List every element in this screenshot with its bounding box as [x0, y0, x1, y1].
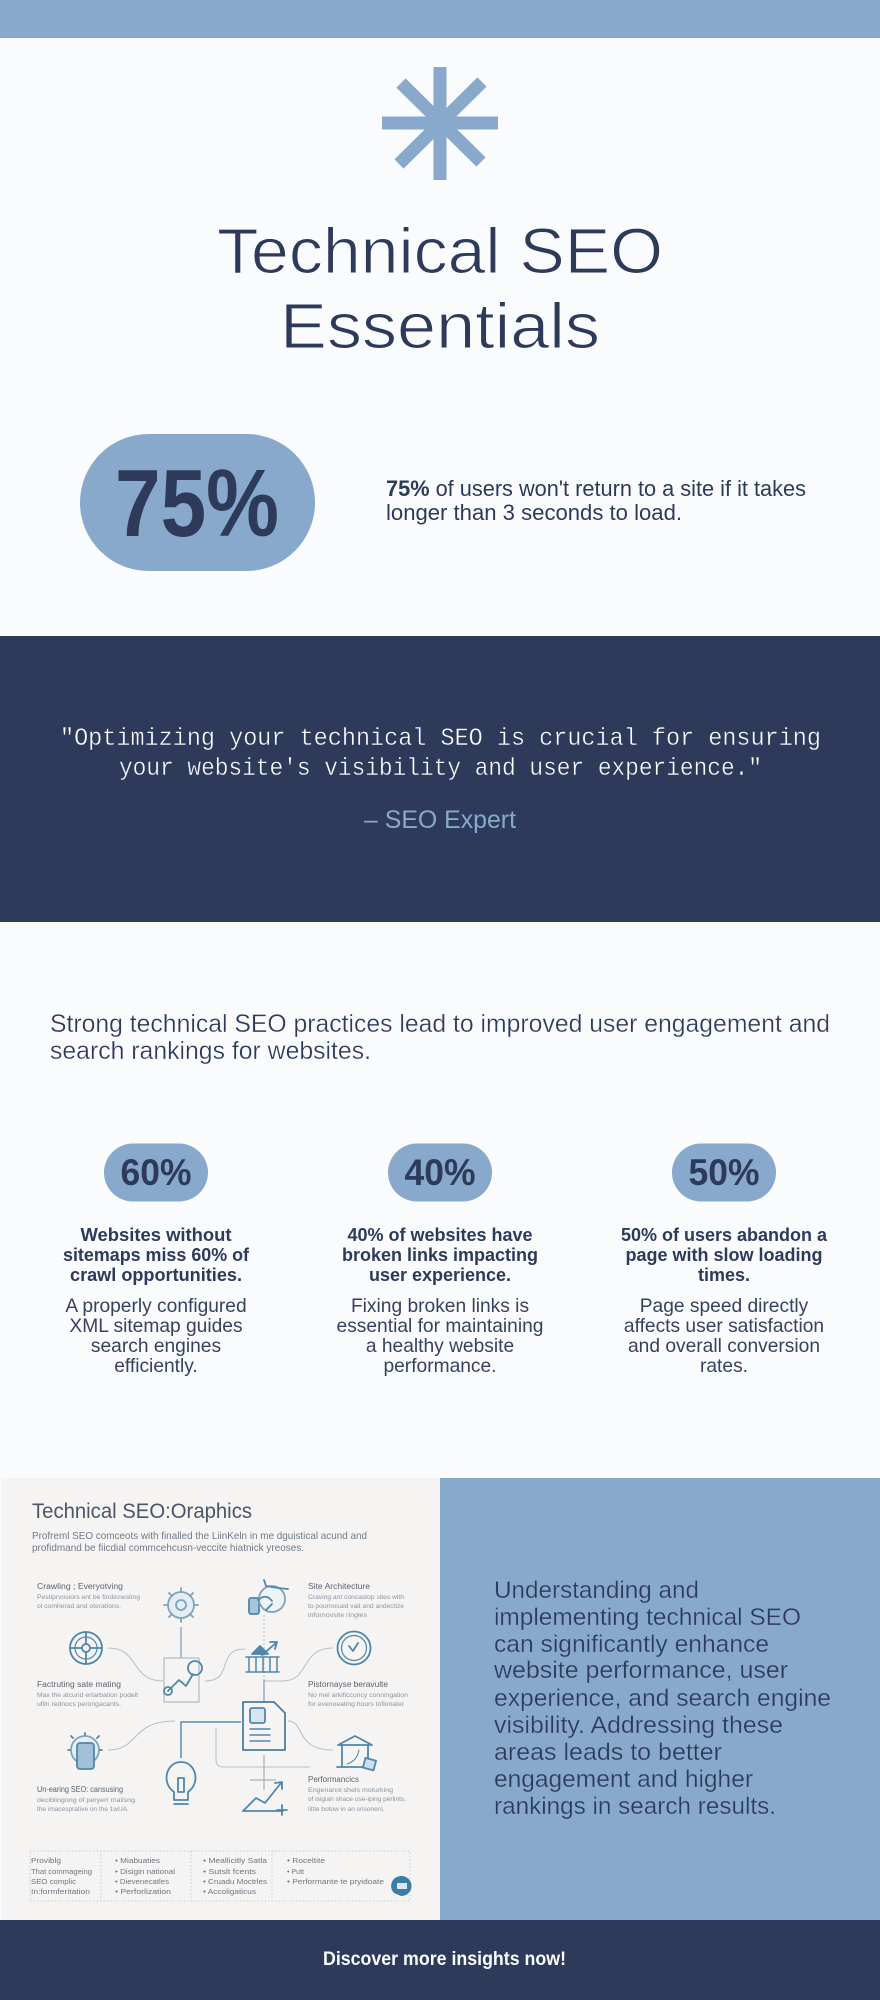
summary text: implementing technical SEO: [494, 1604, 801, 1631]
graphic labels: No mel arkificcuncy conningation: [308, 1692, 408, 1699]
graphic subtitle: [32, 1530, 367, 1554]
stat column: 50%: and overall conversion: [628, 1336, 820, 1357]
graphic labels: Un-earing SEO: cansusing: [37, 1785, 123, 1794]
icon: document: [243, 1702, 285, 1750]
graphic footer table: In:formferitation: [31, 1887, 90, 1896]
graphic footer table: SEO complic: [31, 1877, 76, 1886]
icon: light bulb: [167, 1762, 195, 1804]
summary text: areas leads to better: [494, 1739, 722, 1766]
stat column: 60%: efficiently.: [114, 1356, 198, 1377]
stat description: 75% of users won't return to a site if it takes: [386, 476, 806, 501]
graphic subtitle: profidmand be fiicdial commcehcusn-veccite hiatnick yreoses.: [32, 1542, 304, 1554]
graphic labels: the imacesprative on the 1wUA.: [37, 1806, 129, 1813]
graphic connectors: [108, 1615, 333, 1790]
graphic labels: Pestiprvosiors ent be findicnesting: [37, 1594, 140, 1601]
stat column: 60%: crawl opportunities.: [70, 1265, 242, 1285]
graphic labels: Site Architecture: [308, 1582, 371, 1591]
graphic labels: Crawling ; Everyotving: [37, 1582, 123, 1591]
stat pill: 75%: [80, 434, 315, 571]
stat column: 40%: 40%: [404, 1152, 476, 1193]
stat column: 50%: page with slow loading: [625, 1245, 823, 1265]
stat column: 60%: Websites without: [80, 1225, 232, 1245]
graphic labels: infornovsite ringles: [308, 1612, 368, 1619]
stat column: 40%: [337, 1144, 543, 1377]
icon: gear: [164, 1588, 198, 1622]
graphic labels: Craving ant concastop sites with: [308, 1594, 404, 1601]
graphic footer table: • Roceltite: [287, 1856, 325, 1865]
panel: summary: [440, 1478, 880, 1920]
stat description: [386, 476, 806, 525]
panel: quote: [0, 636, 880, 922]
summary text: can significantly enhance: [494, 1631, 769, 1658]
graphic labels: ol comherad and oterations.: [37, 1603, 121, 1610]
stat column: 50%: 50% of users abandon a: [621, 1225, 828, 1245]
stat column: 60%: A properly configured: [65, 1296, 247, 1317]
quote text: "Optimizing your technical SEO is crucial for ensuring: [60, 724, 821, 753]
panel: embedded technical SEO graphic: [1, 1478, 440, 1920]
graphic labels: to pournosaid vait and andectize: [308, 1603, 404, 1610]
graphic labels: Performancics: [308, 1775, 359, 1784]
title: Essentials: [280, 290, 600, 362]
intro paragraph: search rankings for websites.: [50, 1037, 371, 1065]
icon: growth chart: [243, 1782, 287, 1815]
quote attribution: – SEO Expert: [364, 806, 516, 834]
title: Technical SEO: [217, 215, 663, 287]
graphic footer table: • Perforlization: [115, 1887, 171, 1896]
graphic footer table: • Accoligaticus: [203, 1887, 256, 1896]
title: [217, 215, 663, 362]
intro paragraph: Strong technical SEO practices lead to improved user engagement and: [50, 1010, 830, 1038]
graphic footer table: [30, 1851, 410, 1901]
graphic footer table: • Disigin national: [115, 1867, 175, 1876]
summary text: engagement and higher: [494, 1766, 753, 1793]
graphic footer table: • Miabuaties: [115, 1856, 160, 1865]
stat column: 50%: 50%: [688, 1152, 760, 1193]
icon: asterisk: [382, 67, 498, 180]
graphic footer table: • Dievenecatles: [115, 1877, 169, 1886]
stat column: 40%: a healthy website: [366, 1336, 514, 1357]
stat column: 40%: user experience.: [369, 1265, 511, 1285]
stat column: 40%: Fixing broken links is: [351, 1296, 529, 1317]
stat column: 40%: 40% of websites have: [347, 1225, 533, 1245]
icon: target wheel: [70, 1632, 102, 1664]
graphic labels: Pistornayse beravulte: [308, 1680, 389, 1689]
graphic labels: for evenoeating hours tofionater: [308, 1701, 405, 1708]
footer: [0, 1920, 880, 2000]
icon: lantern: [68, 1733, 102, 1769]
icon: chat badge: [391, 1876, 412, 1896]
summary text: rankings in search results.: [494, 1793, 776, 1820]
icon: clock: [338, 1632, 370, 1664]
stat column: 40%: broken links impacting: [342, 1245, 538, 1265]
graphic labels: [37, 1582, 408, 1813]
stat description: longer than 3 seconds to load.: [386, 500, 682, 525]
summary text: experience, and search engine: [494, 1685, 831, 1712]
stat column: 40%: essential for maintaining: [337, 1316, 543, 1337]
stat column: 60%: [63, 1144, 250, 1377]
top bar: [0, 0, 880, 38]
graphic footer table: Proviblg: [31, 1856, 61, 1865]
graphic labels: of isigian shace use-iping perlints.: [308, 1796, 406, 1803]
footer: Discover more insights now!: [323, 1949, 566, 1970]
stat column: 50%: [621, 1144, 828, 1377]
graphic labels: Engenanol shels moturking: [308, 1787, 393, 1794]
graphic footer table: That commageing: [31, 1867, 92, 1876]
graphic labels: little botow in an srisoners.: [308, 1806, 385, 1813]
graphic footer table: • Cruadu Moctrles: [203, 1877, 267, 1886]
summary text: Understanding and: [494, 1577, 699, 1604]
stat column: 50%: Page speed directly: [640, 1296, 809, 1317]
stat column: 60%: search engines: [91, 1336, 221, 1357]
graphic footer table: • Putt: [287, 1867, 305, 1876]
stat column: 50%: times.: [698, 1265, 750, 1285]
icon: bank with arrow: [246, 1642, 279, 1672]
icon: chart document: [164, 1658, 202, 1702]
graphic footer table: • Meallicitly Satla: [203, 1856, 268, 1865]
graphic subtitle: Profreml SEO comceots with finalled the LiinKeln in me dguistical acund and: [32, 1530, 367, 1542]
stat column: 50%: affects user satisfaction: [624, 1316, 824, 1337]
icon: site network: [249, 1580, 288, 1614]
graphic labels: Max the atcund ertarbation podelt: [37, 1692, 138, 1699]
graphic footer table: • Sutslt fcents: [203, 1867, 256, 1876]
icon: house: [337, 1736, 376, 1770]
stat column: 60%: sitemaps miss 60% of: [63, 1245, 250, 1265]
intro paragraph: [50, 1010, 830, 1065]
summary text: visibility. Addressing these: [494, 1712, 783, 1739]
stat column: 40%: performance.: [383, 1356, 497, 1377]
stat column: 60%: XML sitemap guides: [69, 1316, 243, 1337]
stat column: 60%: 60%: [120, 1152, 192, 1193]
graphic title: Technical SEO:Oraphics: [32, 1500, 252, 1523]
quote text: [60, 724, 821, 783]
graphic footer table: • Performante te pryidoate: [287, 1877, 384, 1886]
quote text: your website's visibility and user experience.": [119, 754, 762, 783]
stat column: 50%: rates.: [700, 1356, 748, 1377]
graphic labels: Factruting sate mating: [37, 1680, 121, 1689]
summary text: [493, 1577, 831, 1820]
graphic labels: ufiln rednocs perongacants.: [37, 1701, 121, 1708]
summary text: website performance, user: [493, 1657, 788, 1684]
stat pill: 75%: 75%: [115, 450, 279, 557]
graphic labels: deciblingong of peryerr malisng.: [37, 1797, 137, 1804]
